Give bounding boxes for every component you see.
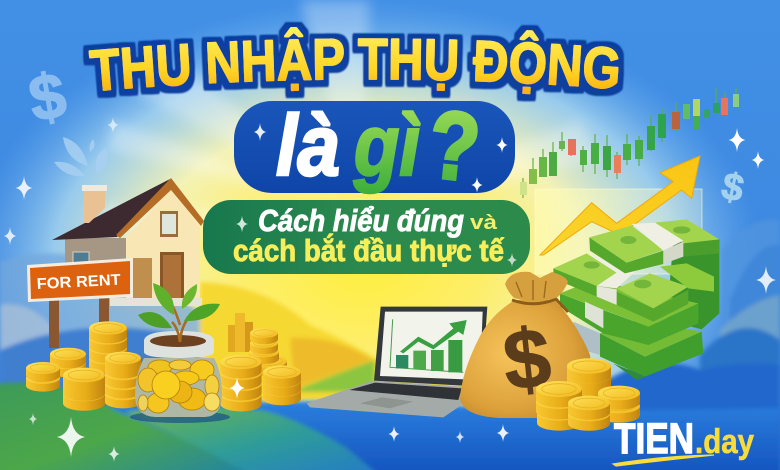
cash stacks [553,219,719,380]
pill: subtitle [203,200,530,274]
subtitle small word: và [470,212,498,234]
coin stack far back [50,348,86,377]
door [160,252,184,302]
coins near bag [536,358,640,431]
small side window [73,252,89,272]
pale chart panel [535,189,702,274]
subtitle line two: cách bắt đầu thực tế [233,232,505,268]
jar rim [144,331,214,358]
leaf [182,284,197,309]
back cash pile [667,239,719,329]
plant stem [172,305,190,342]
second cash brick [553,253,714,322]
laptop [307,307,487,417]
growth arrow [540,156,700,255]
for rent sign [27,258,133,348]
sign text: FOR RENT [36,272,122,293]
dark roof [52,179,170,240]
coin stacks left [26,321,141,411]
grey strap [573,322,600,355]
bag ruffle folds [516,280,546,300]
coin stacks right of jar [220,313,301,411]
dollar symbol: $ [499,310,555,408]
la text: là [276,98,340,194]
house [52,178,204,306]
chimney [82,185,107,223]
keyboard [349,383,462,400]
porch [110,298,202,306]
screen chart [390,319,467,372]
leaf [153,283,174,315]
coin stack middle [63,368,105,411]
money bag [460,272,591,418]
soil [150,335,206,347]
coin stack tall [89,321,127,373]
gi text: gì [353,98,420,194]
roof trim [116,178,204,238]
pale leaf splash [54,137,108,176]
logo [613,415,754,466]
dollar sign right: $ [718,165,747,211]
logo swoosh [613,455,714,466]
sun rays [100,0,600,240]
bag neck tie [512,299,568,312]
bottom cash brick [600,320,703,380]
jar body [135,358,222,417]
front wall [126,190,200,300]
pill: la gi [234,91,515,202]
coin jar with plant [130,283,230,423]
window [160,211,178,237]
candlestick chart [520,88,739,198]
coin stack tall [220,355,262,411]
logo wordmark: TIEN [614,415,694,463]
laptop screen [374,307,487,387]
trackpad [360,397,413,408]
leaf [138,312,172,328]
logo suffix: .day [695,423,754,461]
coin stack [567,358,611,403]
foreground hills [0,383,780,470]
coin stack front [105,352,141,408]
side wall [65,238,127,280]
third cash brick [560,280,698,345]
jar coins [138,360,220,413]
coin stack [536,381,582,431]
stacked gold bars [228,313,253,352]
bag ruffle top [505,272,568,301]
title: THU NHẬP THỤ ĐỘNG [82,21,625,102]
dollar sign left: $ [24,59,71,136]
coin stack low [263,365,301,405]
subtitle line one: Cách hiểu đúng [258,203,464,238]
screen surface [380,312,483,380]
top cash brick [589,219,719,273]
coin stack [568,396,610,431]
bag body [460,300,591,418]
coin stack [598,386,640,423]
coin stack back [249,328,287,376]
coin stack small [26,362,60,392]
sparkles [4,117,776,462]
garage panel [133,258,152,298]
laptop base [307,381,463,417]
jar shadow [130,411,230,423]
background hills [0,219,780,470]
leaf [184,304,220,321]
question mark: ? [424,91,485,202]
